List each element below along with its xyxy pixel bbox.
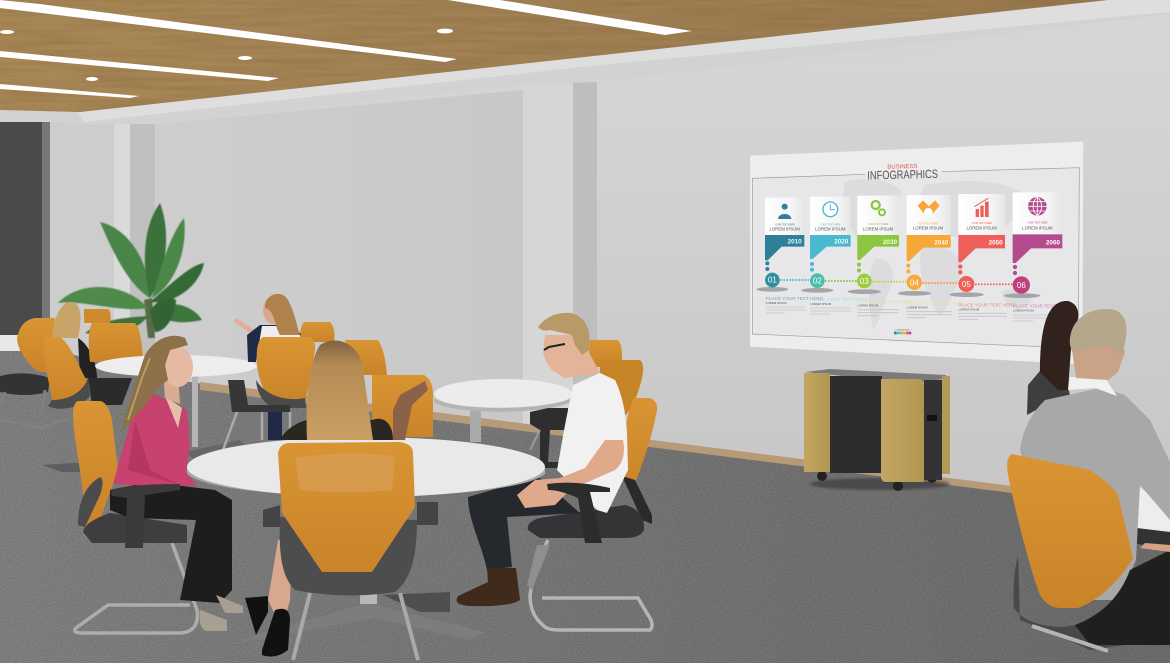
man's boot (456, 568, 520, 606)
card 2: LOREM IPSUM (815, 226, 846, 231)
card 5: PLACE YOUR TEXT HERE (958, 303, 1016, 308)
card 4: LOREM IPSUM (907, 305, 928, 309)
card 6 (1004, 192, 1070, 321)
pink top (113, 393, 197, 486)
front chair ring (280, 517, 417, 596)
card 6: PLACE YOUR TEXT HERE (1013, 304, 1070, 309)
card 5: LOREM IPSUM (967, 226, 997, 231)
card 1: PLACE YOUR TEXT HERE (766, 296, 823, 301)
ponytail and hair (120, 336, 188, 433)
t-shirt (557, 373, 628, 513)
neck and face (163, 372, 180, 404)
card 3: 2030 (883, 239, 897, 246)
card 6: 2060 (1046, 240, 1060, 247)
card 1: 01 (768, 276, 777, 285)
title: BUSINESS (887, 164, 918, 171)
card 1: LOREM IPSUM (770, 227, 800, 232)
card 4: LOREM IPSUM (913, 226, 944, 231)
card 6: LOREM IPSUM (1022, 225, 1053, 230)
cart (804, 369, 950, 491)
legend swatches: LOREM IPSUM (895, 329, 910, 331)
dotted timeline (780, 280, 1013, 284)
plant (58, 203, 204, 338)
card 5: YOUR TEXT HERE (971, 223, 992, 225)
white table edge (1137, 485, 1170, 532)
seat (83, 513, 187, 543)
card 2: 02 (813, 276, 822, 285)
card 5 (949, 194, 1016, 319)
card 1: LOREM IPSUM (766, 301, 787, 305)
black heels (245, 596, 290, 657)
head (543, 335, 600, 378)
pants (110, 482, 232, 603)
card 6: LOREM IPSUM (1013, 309, 1034, 313)
ceiling (0, 0, 1170, 124)
card 5: 05 (962, 280, 971, 289)
dark trousers (1075, 550, 1170, 645)
collar (1068, 377, 1117, 396)
man's chair and legs (456, 398, 657, 630)
armrest (110, 484, 180, 548)
card 6: YOUR TEXT HERE (1027, 223, 1048, 225)
chairs behind the man (530, 340, 643, 468)
world map (843, 179, 1032, 328)
card 3: LOREM IPSUM (863, 226, 894, 231)
poster: business infographics (750, 142, 1083, 364)
middle table (95, 355, 257, 460)
card 3 (848, 196, 915, 316)
card 5: 2050 (989, 240, 1003, 247)
man in white t-shirt (517, 313, 628, 543)
legend swatches (894, 329, 911, 334)
card 4: PLACE YOUR TEXT HERE (907, 301, 964, 306)
card 3: 03 (860, 277, 869, 286)
ceiling lights (0, 0, 692, 98)
title: INFOGRAPHICS (867, 167, 938, 182)
chrome rail (1032, 626, 1108, 651)
card 3: PLACE YOUR TEXT HERE (857, 299, 915, 304)
woman with dark ponytail (1027, 301, 1078, 415)
seated woman in the back (223, 294, 334, 450)
woman in pink with chair (73, 336, 243, 633)
front chair back (278, 442, 415, 572)
baseboard (200, 382, 1012, 493)
center-back chairs and table (345, 340, 572, 442)
man in grey sweater with chair (1007, 309, 1170, 651)
raised arm and hand (393, 381, 428, 440)
carpet floor (0, 335, 1170, 663)
front chair legs (293, 593, 418, 660)
armrest (547, 483, 610, 543)
poster frame lines (752, 168, 1079, 348)
chrome sled base (75, 543, 197, 633)
card 3: YOUR TEXT HERE (868, 224, 889, 226)
sparkly top (280, 418, 393, 440)
blonde hair (307, 340, 373, 440)
card 4: 04 (910, 278, 919, 287)
woman with blonde hair and front chair (245, 340, 438, 660)
neck and head (1072, 340, 1125, 380)
card 4 (898, 195, 964, 318)
card 3: LOREM IPSUM (857, 304, 879, 308)
card 2 (801, 197, 868, 314)
card 4: YOUR TEXT HERE (918, 224, 939, 226)
card 2: LOREM IPSUM (810, 302, 832, 306)
card 1 (756, 198, 823, 313)
forearm and hand (517, 440, 624, 508)
chair back (1007, 454, 1133, 608)
card 4: 2040 (934, 239, 949, 246)
hand (1140, 543, 1170, 552)
card 2: YOUR TEXT HERE (820, 224, 841, 226)
man's jeans (468, 478, 580, 570)
card 1: YOUR TEXT HERE (774, 225, 795, 227)
front table (187, 437, 545, 642)
card 2: PLACE YOUR TEXT HERE (810, 297, 868, 302)
card 6: 06 (1017, 281, 1026, 290)
card 1: 2010 (788, 238, 802, 245)
pink chair back (73, 401, 118, 528)
chair ring (1014, 555, 1160, 650)
sweater (1020, 388, 1170, 600)
sandals (200, 595, 243, 631)
card 5: LOREM IPSUM (958, 307, 980, 311)
armrests (263, 502, 438, 527)
title (867, 164, 938, 182)
poster sheet (750, 142, 1083, 364)
card 2: 2020 (834, 238, 849, 245)
back-left chairs and tables (0, 302, 257, 472)
